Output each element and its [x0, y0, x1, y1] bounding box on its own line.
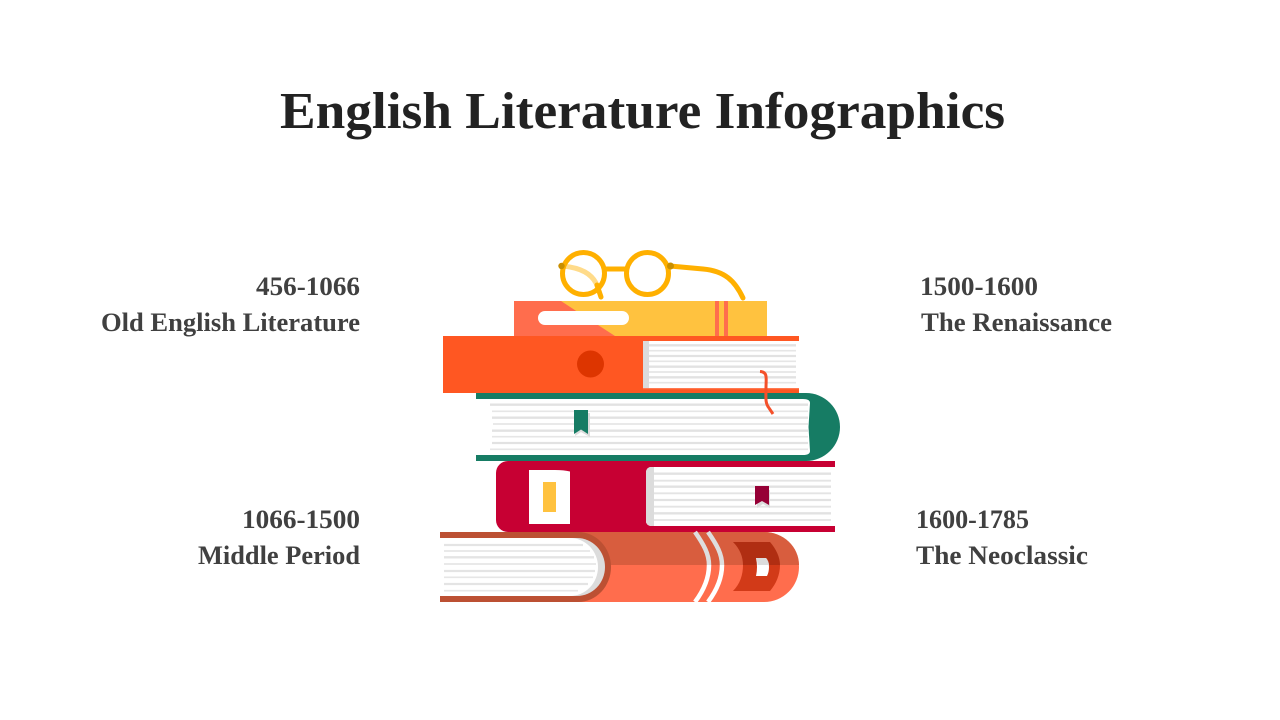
ribbon: orange bookmark	[760, 372, 773, 414]
title: English Literature Infographics	[280, 83, 1005, 140]
bookmark: green	[574, 410, 590, 437]
book: green	[476, 393, 840, 461]
label: The Renaissance: 1500-1600	[920, 272, 1038, 301]
label: Old English Literature	[101, 272, 360, 337]
label: The Neoclassic: The Neoclassic	[916, 541, 1088, 570]
illustration: stack of books with glasses	[440, 252, 840, 602]
icon: glasses	[558, 252, 743, 298]
label: The Renaissance	[920, 272, 1112, 337]
label: The Neoclassic: 1600-1785	[916, 505, 1029, 534]
spine emblem	[733, 542, 780, 591]
label: Middle Period: Middle Period	[198, 541, 361, 570]
bookmark: maroon	[755, 486, 770, 508]
book: red	[496, 461, 835, 532]
book: yellow	[514, 301, 767, 336]
label: Old English Literature: 456-1066	[256, 272, 360, 301]
label: Old English Literature: Old English Literature	[101, 308, 360, 337]
book: coral	[440, 532, 799, 602]
label: Middle Period	[198, 505, 361, 570]
label: The Renaissance: The Renaissance	[921, 308, 1112, 337]
spine bands	[695, 532, 722, 602]
book: orange	[443, 336, 799, 393]
label: The Neoclassic	[916, 505, 1088, 570]
label: Middle Period: 1066-1500	[242, 505, 360, 534]
